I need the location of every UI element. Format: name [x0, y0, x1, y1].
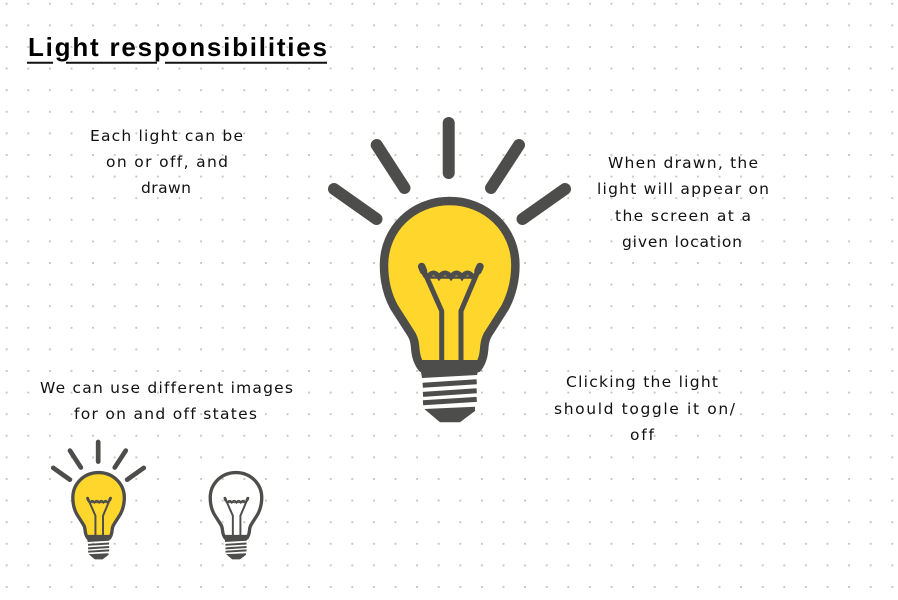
text: each light can be on or off, and drawn: on or off, and — [106, 153, 228, 171]
text: each light can be on or off, and drawn — [90, 127, 243, 197]
text: when drawn, the light will appear on the screen — [597, 154, 769, 251]
icon: small lit light bulb — [53, 442, 144, 559]
icon: small unlit light bulb — [210, 473, 262, 559]
text: each light can be on or off, and drawn: Each light can be — [90, 127, 243, 145]
text: when drawn, the light will appear on the screen: the screen at a — [615, 207, 751, 225]
text: clicking the light should toggle it — [554, 373, 736, 444]
icon: large lit light bulb — [334, 123, 565, 422]
text: when drawn, the light will appear on the screen: light will appear on — [597, 180, 769, 198]
text: different images for on and off states — [40, 379, 293, 423]
text: each light can be on or off, and drawn: drawn — [141, 179, 191, 197]
text: clicking the light should toggle it: off — [630, 426, 655, 444]
text: clicking the light should toggle it: should toggle it on/ — [554, 400, 736, 418]
text: when drawn, the light will appear on the screen: When drawn, the — [608, 154, 758, 172]
title: Light responsibilities — [28, 32, 327, 62]
text: when drawn, the light will appear on the screen: given location — [622, 233, 742, 251]
text: different images for on and off states: for on and off states — [74, 405, 257, 423]
text: different images for on and off states: We can use different images — [40, 379, 293, 397]
text: clicking the light should toggle it: Clicking the light — [566, 373, 718, 391]
